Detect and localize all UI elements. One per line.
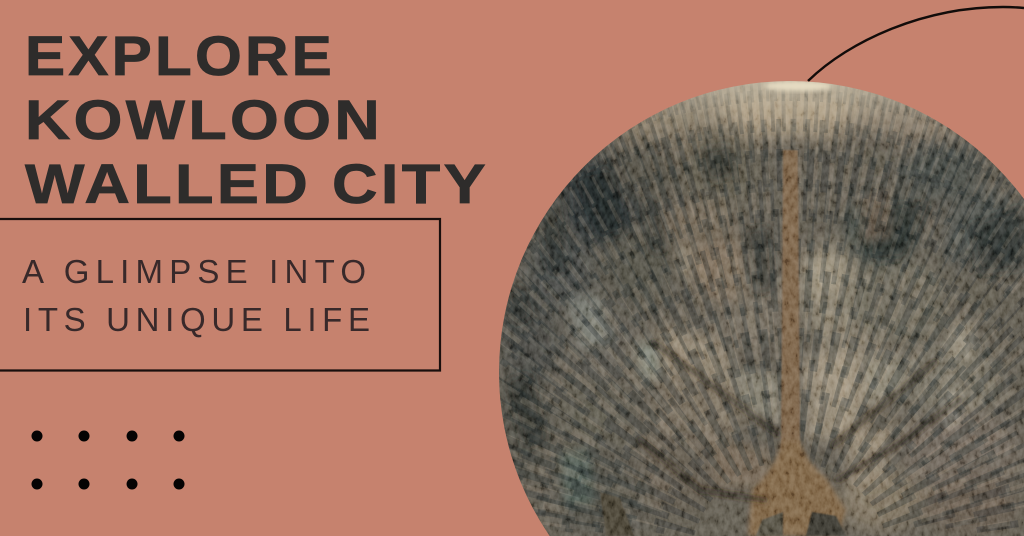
light tower faces xyxy=(499,110,1024,530)
title line 2: KOWLOON xyxy=(25,88,383,151)
shadowed canyons between towers xyxy=(505,145,1024,450)
sunlit tower clusters xyxy=(558,188,975,508)
diagonal dark side streets xyxy=(640,342,960,500)
dark tower faces xyxy=(499,80,1024,530)
subtitle text: A GLIMPSE INTO xyxy=(22,253,366,290)
circular aerial city image xyxy=(490,80,1024,536)
title xyxy=(25,24,489,215)
central avenue xyxy=(781,150,800,450)
junction plaza xyxy=(748,440,846,536)
tonal zones of the city xyxy=(490,88,1024,536)
bright horizon xyxy=(764,81,832,91)
title line 3: WALLED CITY xyxy=(25,152,489,215)
mottled rooftop texture xyxy=(499,81,1024,536)
dot grid xyxy=(32,430,184,490)
warm colour grade xyxy=(499,81,1024,536)
subtitle box xyxy=(0,219,440,370)
title line 1: EXPLORE xyxy=(25,24,335,87)
hazy distance at the top xyxy=(628,81,952,136)
subtitle text xyxy=(22,253,370,338)
box frame xyxy=(0,219,440,370)
subtitle text: ITS UNIQUE LIFE xyxy=(23,301,370,338)
plaza corner blocks xyxy=(600,492,846,536)
decorative arc xyxy=(808,7,1024,81)
